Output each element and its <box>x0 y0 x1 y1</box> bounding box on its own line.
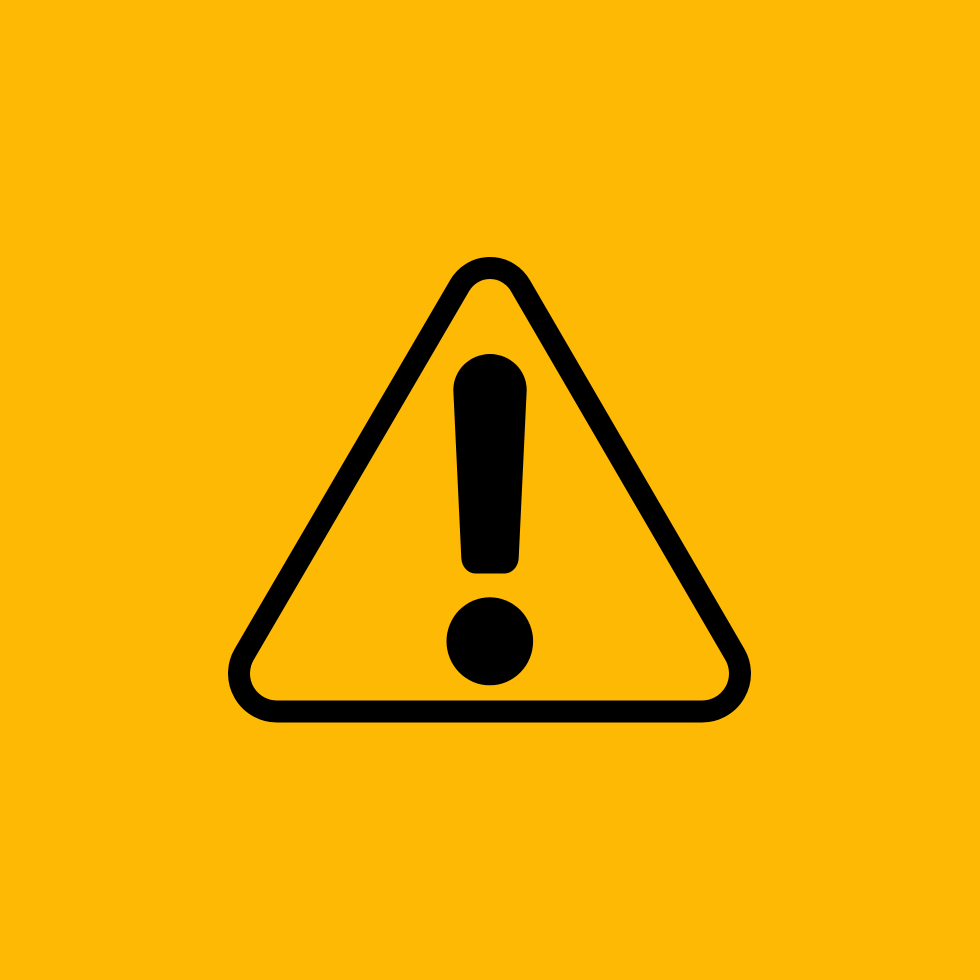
icon: exclamation mark <box>446 354 533 685</box>
exclamation bar <box>453 354 527 574</box>
exclamation dot <box>446 597 533 685</box>
icon: triangle outline <box>239 268 740 712</box>
